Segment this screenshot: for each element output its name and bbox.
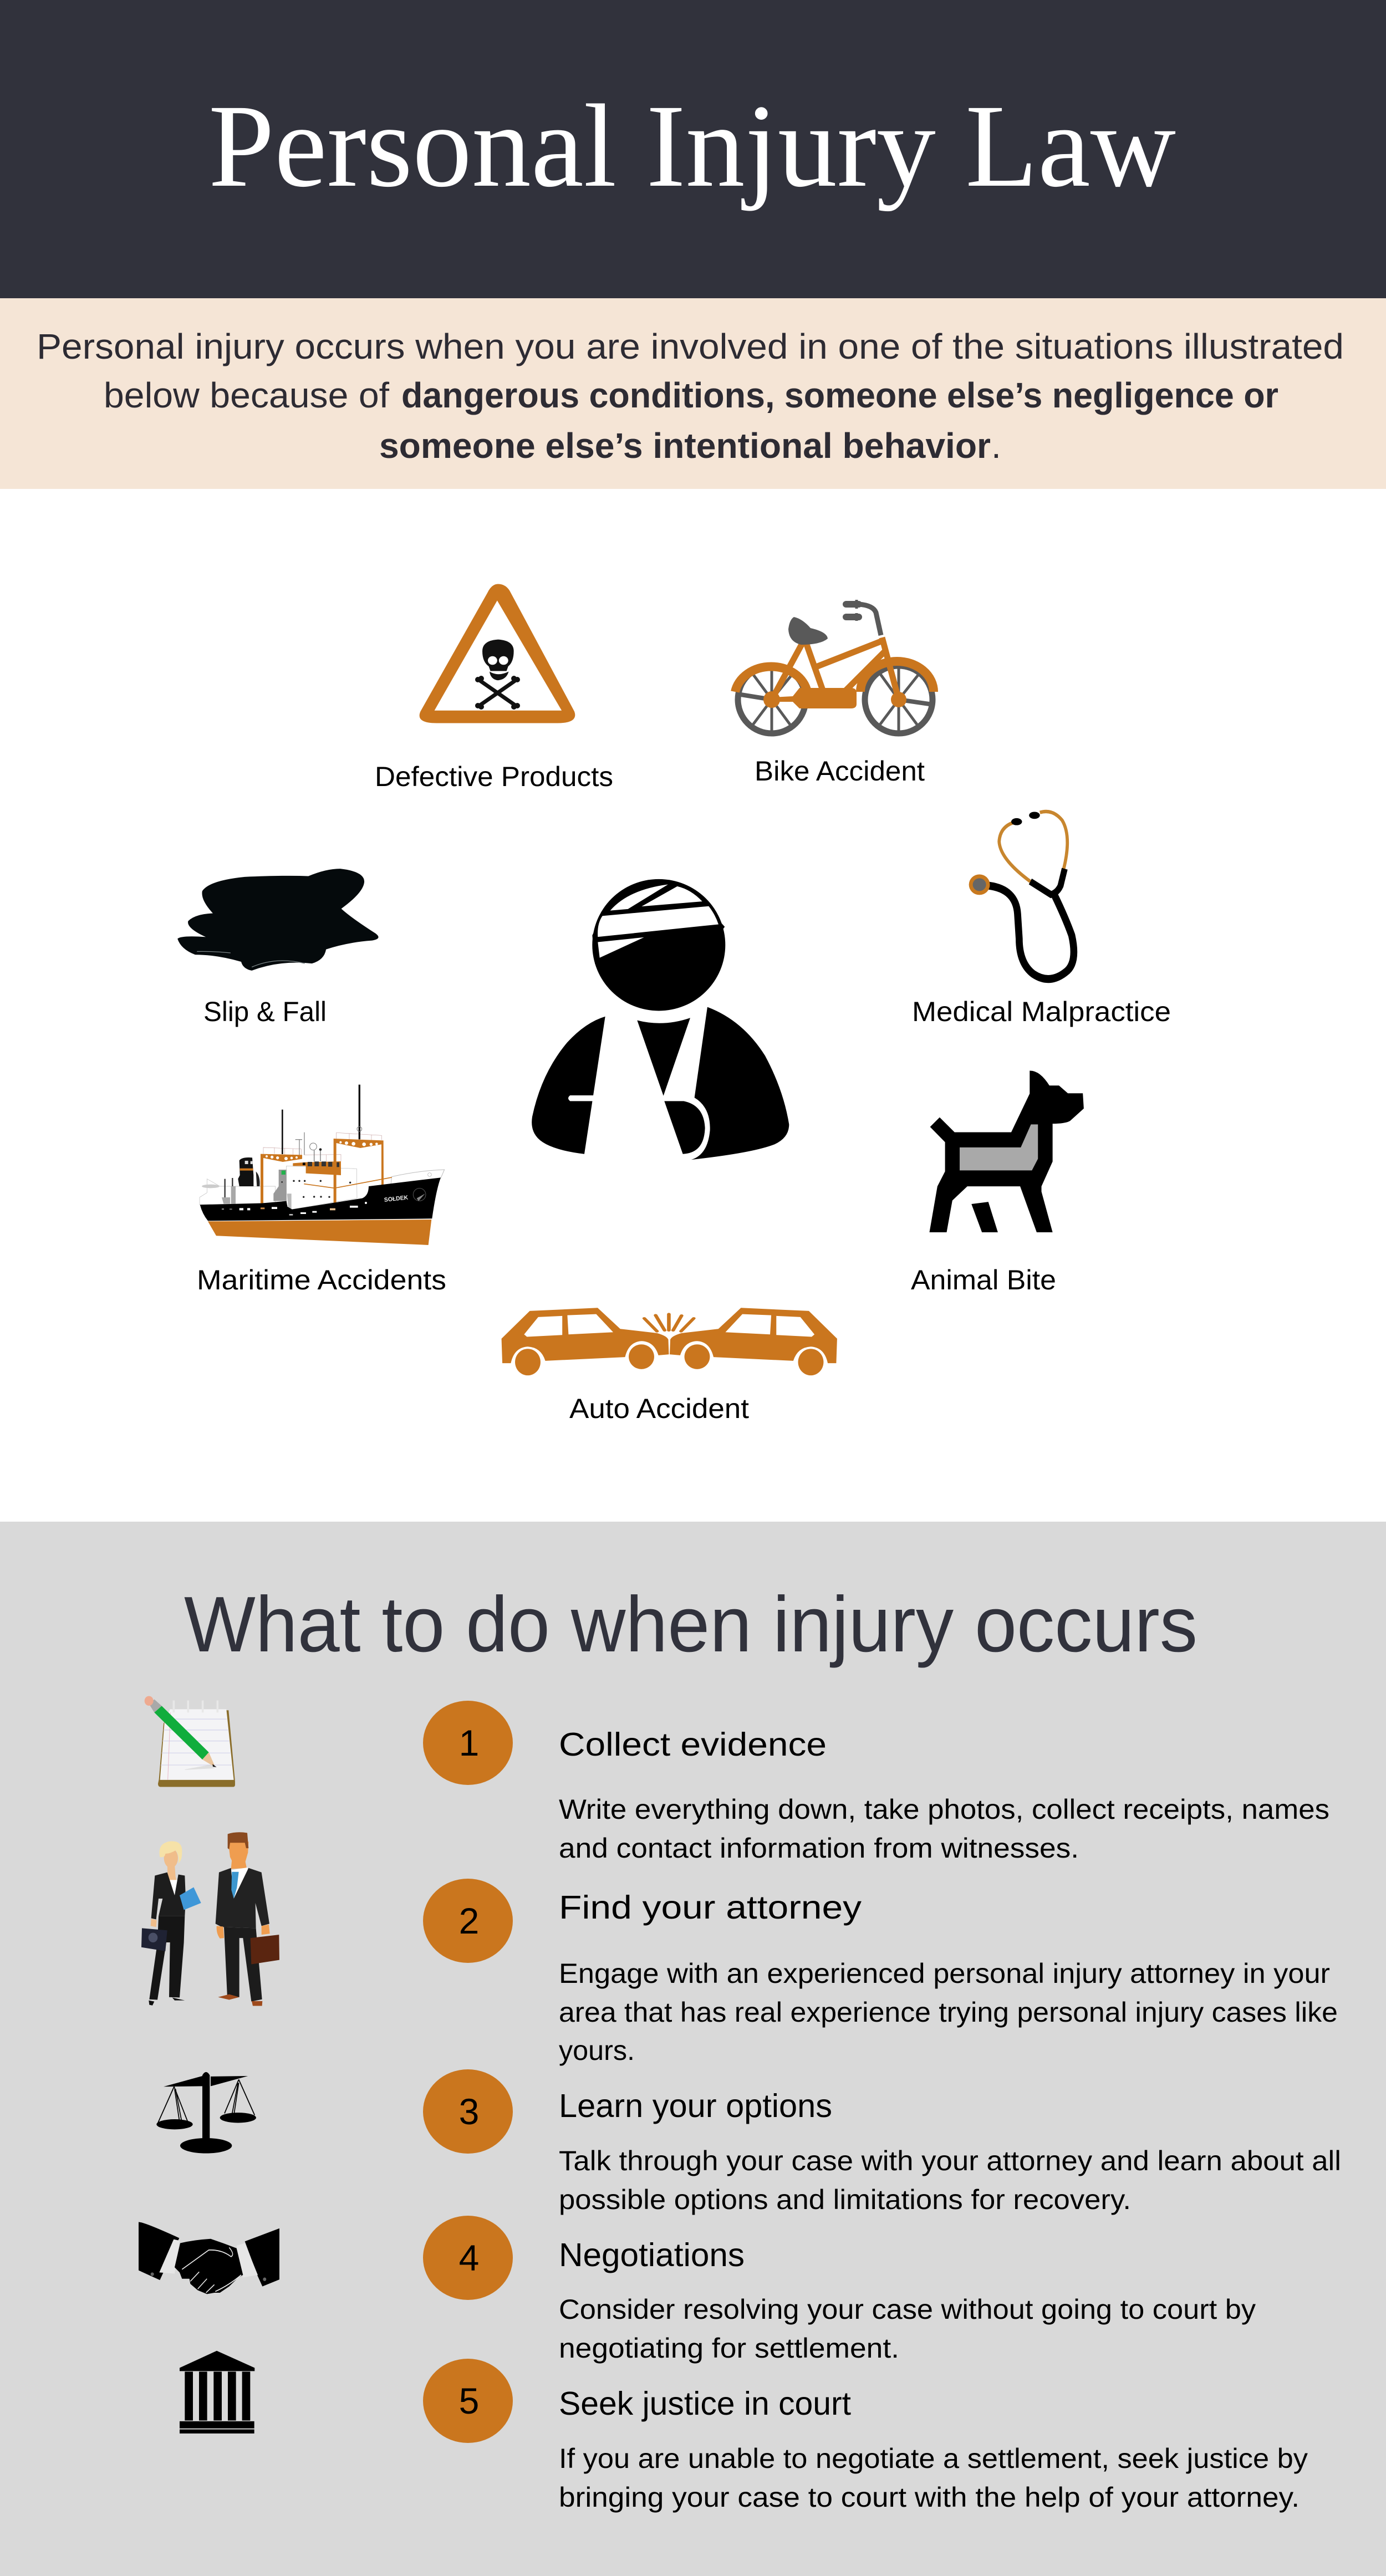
label: bike accident: Bike Accident [755,756,925,787]
label: slip and fall: Slip & Fall [203,996,327,1027]
step 2 [423,1879,1338,2066]
label: animal bite: Animal Bite [911,1264,1056,1295]
step 1 heading: Collect evidence [559,1726,827,1763]
icon: oil puddle [177,869,379,971]
intro band [0,298,1386,489]
icon: dog [929,1070,1084,1232]
intro line 3 bold: someone else’s intentional behavior [379,426,991,466]
section heading: What to do when injury occurs [184,1580,1198,1669]
icon: handshake [139,2222,279,2294]
intro line 1: Personal injury occurs when you are involved in one of the situations illustrated [37,327,1344,366]
label: defective products: Defective Products [375,761,613,792]
label: medical malpractice: Medical Malpractice [912,996,1171,1027]
intro line 2 bold: dangerous conditions, someone else’s negligence or [401,375,1278,415]
step 5 [423,2359,1308,2513]
step 2 heading: Find your attorney [559,1889,862,1926]
step 3 text: possible options and limitations for recovery. [559,2184,1131,2215]
step 1: 1 [459,1722,479,1763]
title: Personal Injury Law [208,80,1176,212]
step 5 text: bringing your case to court with the help of your attorney. [559,2482,1300,2513]
icon: car crash [502,1308,837,1375]
step 5: 5 [459,2380,479,2421]
step 4: 4 [459,2237,479,2278]
icon: courthouse [180,2351,254,2434]
icon: warning triangle with skull [420,584,575,723]
label: auto accident: Auto Accident [569,1393,749,1424]
intro line 2 regular: below because of [104,375,389,415]
intro line 3 period: . [991,426,1001,466]
step 3: 3 [459,2091,479,2132]
step 2 text: area that has real experience trying personal injury cases like [559,1997,1338,2028]
step 5 text [559,2443,1308,2513]
step 5 heading: Seek justice in court [559,2385,851,2422]
icon: ship [200,1085,445,1245]
step 4 text: Consider resolving your case without going to court by [559,2294,1256,2325]
step 3 text: Talk through your case with your attorney and learn about all [559,2145,1341,2176]
step 4 text: negotiating for settlement. [559,2333,899,2364]
step 4 text [559,2294,1256,2364]
icon: stethoscope [969,812,1074,979]
label: maritime accidents: Maritime Accidents [197,1264,446,1295]
icon: scales of justice [156,2072,256,2154]
step 4 heading: Negotiations [559,2237,745,2273]
panel: what to do [0,1522,1386,2576]
step 3 heading: Learn your options [559,2088,832,2124]
icon: notepad and pencil [145,1696,235,1787]
step 5 text: If you are unable to negotiate a settlement, seek justice by [559,2443,1308,2474]
step 2 text: yours. [559,2035,635,2066]
man attorney [216,1832,279,2006]
step 1 text: Write everything down, take photos, collect receipts, names [559,1794,1329,1825]
step 2 text: Engage with an experienced personal injury attorney in your [559,1958,1330,1989]
icon: bicycle [735,600,934,733]
ship name: SOŁDEK [384,1194,409,1203]
step 3 [423,2069,1341,2215]
header band [0,0,1386,298]
step 1 [423,1701,1329,1864]
panel: types of injury [177,584,1171,1424]
step 1 text [559,1794,1329,1864]
step 3 text [559,2145,1341,2215]
step 1 text: and contact information from witnesses. [559,1833,1079,1864]
icon: injured person with bandage and sling [532,879,789,1160]
step 4 [423,2216,1256,2364]
woman attorney [141,1841,201,2006]
step 2 text [559,1958,1338,2066]
icon: two attorneys [141,1832,279,2006]
step 2: 2 [459,1900,479,1941]
